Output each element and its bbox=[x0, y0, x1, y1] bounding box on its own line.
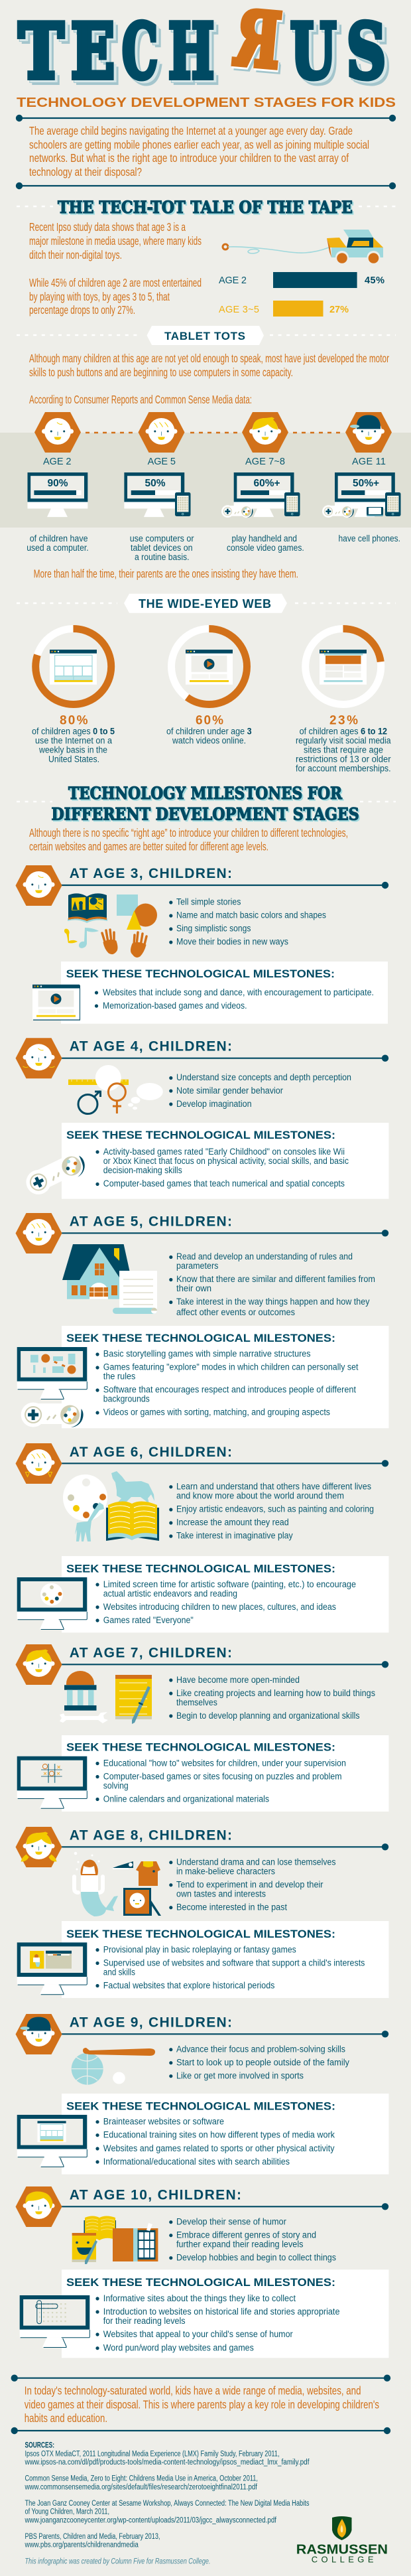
icon: computer with fantasy game bbox=[17, 1942, 87, 1995]
text: toy percentages bbox=[29, 276, 202, 317]
bar chart: toys by age: AGE 3~5 bbox=[219, 305, 259, 315]
text: age 6 skills: and know more about the world around them bbox=[176, 1491, 344, 1501]
text: age 8 milestones: Supervised use of websites and software that support a child's interests bbox=[103, 1958, 365, 1968]
heading: at age 5 bbox=[16, 1213, 388, 1253]
text: age 6 skills: Increase the amount they read bbox=[176, 1518, 289, 1528]
text: age 5 milestones: Games featuring "explore" modes in which children can personally set bbox=[103, 1362, 359, 1372]
text: age 8 milestones: Factual websites that explore historical periods bbox=[103, 1980, 275, 1990]
heading: seek milestones: SEEK THESE TECHNOLOGICAL MILESTONES: bbox=[66, 1562, 335, 1575]
text: age 5 milestones: Software that encourages respect and introduces people of different bbox=[103, 1385, 356, 1395]
text: toy percentages: by playing with toys, by ages 3 to 5, that bbox=[29, 290, 170, 303]
text: age 10 milestones bbox=[95, 2293, 339, 2353]
text: age 6 skills bbox=[169, 1482, 374, 1541]
stat 60%: 60% bbox=[196, 714, 223, 728]
panel: age 6 bbox=[16, 1443, 388, 1632]
label: age 5: AGE 5 bbox=[148, 457, 176, 467]
icon: age 11 child bbox=[345, 412, 392, 453]
text: age 3 milestones bbox=[95, 987, 374, 1011]
subtitle: TECHNOLOGY DEVELOPMENT STAGES FOR KIDS bbox=[17, 96, 396, 110]
icon: computer and phone 50% bbox=[124, 472, 191, 517]
caption: of children have bbox=[30, 534, 88, 543]
panel: age 7-8 stat bbox=[221, 412, 304, 553]
text: age 6 milestones: Websites introducing children to new places, cultures, and ideas bbox=[103, 1602, 336, 1612]
caption: of children under age 3 bbox=[166, 727, 252, 737]
text: age 8 skills: own tastes and interests bbox=[176, 1889, 266, 1899]
text: age 10 milestones: Websites that appeal to your child's sense of humor bbox=[103, 2329, 293, 2339]
text: age 10 skills: Embrace different genres of story and bbox=[176, 2230, 316, 2240]
title letters TECH: E bbox=[71, 7, 115, 96]
sources: www.commonsensemedia.org/sites/default/files/research/zerotoeightfinal2011.pdf bbox=[25, 2483, 258, 2491]
text: age 7 milestones: Online calendars and organizational materials bbox=[103, 1794, 269, 1804]
panel: age 10 milestones bbox=[20, 2269, 388, 2358]
panel: age 3 milestones bbox=[32, 962, 388, 1024]
caption: tablet devices on bbox=[131, 543, 193, 553]
heading: at age 9: AT AGE 9, CHILDREN: bbox=[70, 2015, 232, 2031]
text: age 6 skills: Enjoy artistic endeavors, such as painting and coloring bbox=[176, 1504, 374, 1514]
text: age 6 milestones bbox=[95, 1579, 356, 1625]
text: age 9 skills: Start to look up to people outside of the family bbox=[176, 2058, 349, 2068]
text: motor skills bbox=[29, 352, 389, 379]
heading: at age 6 bbox=[16, 1443, 388, 1484]
caption: of children ages 0 to 5 bbox=[32, 727, 115, 737]
closing block with rules bbox=[11, 2374, 390, 2434]
icon: baseball bat bbox=[83, 2048, 155, 2056]
text: age 4 milestones: decision-making skills bbox=[103, 1165, 182, 1175]
text: age 3 milestones: Websites that include song and dance, with encouragement to participate. bbox=[103, 987, 374, 997]
text: age 9 skills bbox=[169, 2044, 349, 2081]
stat 23%: 23% bbox=[329, 714, 358, 728]
sources: PBS Parents, Children and Media, February 2013, bbox=[25, 2533, 160, 2541]
text: age 4 milestones bbox=[95, 1147, 349, 1188]
text: age 7 skills: Have become more open-minded bbox=[176, 1675, 300, 1685]
heading: the wide-eyed web: THE WIDE-EYED WEB bbox=[139, 597, 271, 610]
credit: This infographic was created by Column Five for Rasmussen College. bbox=[25, 2557, 211, 2565]
panel: age 7 milestones bbox=[17, 1735, 388, 1812]
icon: museum column bbox=[64, 1671, 97, 1711]
text: age 9 milestones: Educational training sites on how different types of media work bbox=[103, 2130, 335, 2140]
text: age 5 skills: Take interest in the way things happen and how they bbox=[176, 1297, 370, 1307]
caption: use the Internet on a bbox=[35, 736, 112, 746]
heading: at age 9 bbox=[16, 2014, 388, 2054]
panel: age 8 milestones bbox=[17, 1921, 388, 1998]
logo text: RASMUSSEN bbox=[296, 2541, 388, 2557]
panel: age 7 bbox=[16, 1644, 388, 1812]
donut chart 60% bbox=[171, 629, 247, 705]
caption bbox=[227, 534, 304, 553]
heading: technology milestones: DIFFERENT DEVELOPMENT STAGES bbox=[52, 804, 359, 823]
icon: notepad and pen bbox=[115, 1675, 152, 1724]
heading: at age 8: AT AGE 8, CHILDREN: bbox=[70, 1827, 232, 1843]
text: age 10 milestones: Word pun/word play websites and games bbox=[103, 2343, 254, 2353]
text: age 7 skills: themselves bbox=[176, 1697, 217, 1707]
text: age 3 skills: Move their bodies in new ways bbox=[176, 936, 288, 946]
text: age 8 skills: Understand drama and can lose themselves bbox=[176, 1857, 336, 1867]
text: age 9 milestones: Brainteaser websites or software bbox=[103, 2117, 224, 2127]
heading: at age 3 bbox=[16, 865, 388, 906]
text: age 8 skills: in make-believe characters bbox=[176, 1867, 275, 1877]
caption bbox=[32, 727, 115, 764]
icon: open book bbox=[84, 2216, 116, 2240]
heading: seek milestones: SEEK THESE TECHNOLOGICAL MILESTONES: bbox=[66, 967, 335, 980]
icon: game pad bbox=[21, 1402, 84, 1427]
text: parents insisting: More than half the time, their parents are the ones insisting they have them. bbox=[34, 567, 298, 581]
icon: ruler and ball bbox=[68, 1065, 129, 1091]
panel: 80% ring bbox=[32, 629, 115, 764]
icon: computer with tic-tac-toe bbox=[17, 1756, 87, 1808]
icon: hands bbox=[102, 930, 147, 957]
icon: video page bbox=[186, 650, 233, 685]
text: age 5 skills: affect other events or outcomes bbox=[176, 1307, 295, 1317]
heading: at age 4 bbox=[16, 1038, 388, 1078]
donut chart 80% bbox=[36, 629, 111, 705]
text: ipso study bbox=[29, 220, 202, 261]
panel: age 8 bbox=[16, 1827, 388, 1998]
icon: game pad bbox=[22, 1149, 89, 1199]
text: age 7 skills: Like creating projects and learning how to build things bbox=[176, 1688, 375, 1698]
icon: orange book with window bbox=[113, 2223, 158, 2261]
caption: a routine basis. bbox=[135, 552, 190, 562]
text: age 7 milestones bbox=[95, 1758, 346, 1804]
bar chart: toys by age: 27% bbox=[329, 305, 349, 315]
text: age 6 skills: Take interest in imaginative play bbox=[176, 1531, 293, 1541]
sources bbox=[25, 2442, 310, 2549]
caption: play handheld and bbox=[232, 534, 297, 543]
text: ipso study: ditch their non-digital toys. bbox=[29, 248, 122, 261]
icon: t-shirt bbox=[136, 1861, 160, 1886]
heading: at age 10 bbox=[16, 2186, 388, 2227]
text: ipso study: Recent Ipso study data shows that age 3 is a bbox=[29, 220, 186, 234]
sources: The Joan Ganz Cooney Center at Sesame Workshop, Always Connected: The New Digital Media Habits bbox=[25, 2500, 310, 2508]
icon: computer with sorting game bbox=[17, 1347, 87, 1399]
text: age 6 milestones: Games rated "Everyone" bbox=[103, 1615, 194, 1625]
sources: Common Sense Media, Zero to Eight: Childrens Media Use in America, October 2011, bbox=[25, 2475, 258, 2483]
panel: age 4 milestones bbox=[22, 1123, 388, 1199]
text: age 9 skills: Advance their focus and problem-solving skills bbox=[176, 2044, 345, 2054]
icon: story book bbox=[68, 893, 107, 923]
heading: at age 7 bbox=[16, 1644, 388, 1685]
caption: have cell phones. bbox=[338, 534, 400, 543]
panel: age 6 milestones bbox=[17, 1556, 388, 1632]
text: age 5 skills: parameters bbox=[176, 1261, 219, 1271]
text: age 9 milestones: Informational/educational sites with search abilities bbox=[103, 2157, 290, 2167]
text: age 10 skills bbox=[169, 2217, 336, 2263]
caption: restrictions of 13 or older bbox=[296, 754, 391, 764]
panel: age 9 milestones bbox=[17, 2094, 388, 2175]
icon: video web page bbox=[32, 985, 80, 1021]
text: age 10 milestones: for their reading levels bbox=[103, 2316, 186, 2326]
heading: at age 4: AT AGE 4, CHILDREN: bbox=[70, 1038, 232, 1054]
text: according to: According to Consumer Reports and Common Sense Media data: bbox=[29, 393, 252, 406]
text: age 6 milestones: actual artistic endeavors and reading bbox=[103, 1589, 237, 1599]
caption: watch videos online. bbox=[172, 736, 246, 746]
heading: seek milestones: SEEK THESE TECHNOLOGICAL MILESTONES: bbox=[66, 1741, 335, 1754]
text: age 4 milestones: Computer-based games that teach numerical and spatial concepts bbox=[103, 1179, 345, 1188]
icon: paint palette bbox=[63, 1474, 107, 1521]
caption: sites that require age bbox=[304, 745, 383, 755]
icon: computer and phone 50%: 50% bbox=[145, 478, 166, 489]
heading: at age 6: AT AGE 6, CHILDREN: bbox=[70, 1445, 232, 1460]
heading: the wide-eyed web bbox=[124, 594, 287, 613]
sources: www.pbs.org/parents/childrenandmedia bbox=[25, 2541, 139, 2549]
heading: seek milestones: SEEK THESE TECHNOLOGICAL MILESTONES: bbox=[66, 1129, 335, 1141]
caption: of children ages 6 to 12 bbox=[300, 727, 387, 737]
heading: at age 7: AT AGE 7, CHILDREN: bbox=[70, 1645, 232, 1660]
text: age 3 milestones: Memorization-based games and videos. bbox=[103, 1001, 247, 1011]
icon: gender symbols bbox=[78, 1084, 125, 1113]
text: age 5 skills bbox=[169, 1252, 375, 1317]
icon: computer with word search bbox=[20, 2295, 89, 2348]
text: age 10 milestones: Introduction to websites on historical life and stories appropriate bbox=[103, 2307, 340, 2317]
icon: horse bbox=[111, 1471, 154, 1506]
band background bbox=[0, 433, 411, 528]
text: no right age bbox=[29, 826, 348, 853]
heading: at age 10: AT AGE 10, CHILDREN: bbox=[70, 2188, 241, 2203]
text: age 8 milestones: Provisional play in basic roleplaying or fantasy games bbox=[103, 1944, 296, 1954]
text: toy percentages: While 45% of children age 2 are most entertained bbox=[29, 276, 202, 289]
icon: framed portrait on easel bbox=[123, 1888, 161, 1916]
text: age 3 skills: Tell simple stories bbox=[176, 896, 241, 906]
text: age 8 milestones bbox=[95, 1944, 365, 1990]
title letters TECH: H bbox=[168, 7, 214, 96]
icon: hat bbox=[113, 1861, 133, 1869]
donut chart 23% bbox=[306, 629, 381, 705]
text: age 7 milestones: Computer-based games or sites focusing on puzzles and problem bbox=[103, 1771, 342, 1781]
bar chart: toys by age bbox=[219, 272, 384, 317]
icon: shapes bbox=[117, 894, 157, 930]
sources: of Young Children, March 2011, bbox=[25, 2508, 109, 2516]
sources: www.joanganzcooneycenter.org/wp-content/uploads/2011/03/jgcc_alwaysconnected.pdf bbox=[25, 2516, 277, 2524]
panel: age 5 bbox=[16, 1213, 388, 1428]
icon: mermaid bbox=[74, 1852, 118, 1916]
icon: web page grid bbox=[50, 650, 97, 685]
text: age 10 skills: further expand their reading levels bbox=[176, 2240, 304, 2250]
caption: United States. bbox=[48, 754, 99, 764]
text: age 5 milestones bbox=[95, 1349, 359, 1417]
title: Tech R Us bbox=[19, 0, 386, 96]
text: age 6 skills: Learn and understand that others have different lives bbox=[176, 1482, 371, 1492]
text: motor skills: skills to push buttons and are beginning to use computers in some capacity. bbox=[29, 366, 293, 379]
caption: weekly basis in the bbox=[38, 745, 107, 755]
logo: Rasmussen College bbox=[296, 2516, 388, 2565]
sources: SOURCES: bbox=[25, 2442, 54, 2450]
text: age 4 skills: Note similar gender behavior bbox=[176, 1086, 283, 1096]
panel: age 4 bbox=[16, 1038, 388, 1199]
label: age 2: AGE 2 bbox=[43, 457, 72, 467]
heading: at age 5: AT AGE 5, CHILDREN: bbox=[70, 1214, 232, 1229]
icon: computer, phone, tablet and game pad 50%+ bbox=[322, 472, 400, 518]
caption: use computers or bbox=[130, 534, 194, 543]
panel: 60% ring bbox=[166, 629, 252, 746]
icon: music notes bbox=[64, 928, 99, 948]
intro text bbox=[29, 124, 369, 179]
icon: computer 90% bbox=[28, 472, 88, 517]
heading: seek milestones: SEEK THESE TECHNOLOGICAL MILESTONES: bbox=[66, 2100, 335, 2112]
text: toy percentages: percentage drops to only 27%. bbox=[29, 303, 135, 317]
title letters TECH: C bbox=[122, 7, 158, 96]
icon: wrench bbox=[60, 1712, 108, 1723]
text: age 5 milestones: the rules bbox=[103, 1372, 136, 1382]
panel: 23% ring bbox=[296, 629, 391, 774]
text: age 7 milestones: Educational "how to" websites for children, under your supervision bbox=[103, 1758, 346, 1768]
heading: the tech-tot tale of the tape: THE TECH-TOT TALE OF THE TAPE bbox=[58, 198, 353, 217]
text: age 4 skills: Understand size concepts and depth perception bbox=[176, 1072, 351, 1082]
text: age 4 skills bbox=[169, 1072, 351, 1109]
text: age 8 skills bbox=[169, 1857, 336, 1912]
panel: age 10 bbox=[16, 2186, 388, 2358]
intro block with rules bbox=[16, 115, 396, 189]
icon: basketball bbox=[72, 2053, 103, 2085]
text: age 7 skills: Begin to develop planning and organizational skills bbox=[176, 1711, 360, 1721]
caption bbox=[296, 727, 391, 774]
stat 80%: 80% bbox=[60, 714, 88, 728]
sources: www.ipsos-na.com/dl/pdf/products-tools/media-content-technology/ipsos_mediact_lmx_family.pdf bbox=[25, 2459, 310, 2467]
text: age 4 skills: Develop imagination bbox=[176, 1099, 252, 1109]
caption bbox=[27, 534, 89, 553]
icon: computer, phone and game pad 60%+ bbox=[221, 472, 300, 518]
heading: tablet tots: TABLET TOTS bbox=[164, 330, 245, 342]
icon: age 5 child bbox=[138, 412, 184, 453]
heading: technology milestones: TECHNOLOGY MILESTONES FOR bbox=[68, 784, 342, 803]
text: age 3 skills: Sing simplistic songs bbox=[176, 923, 251, 933]
text: age 5 skills: Read and develop an understanding of rules and bbox=[176, 1252, 353, 1261]
logo subtext: COLLEGE bbox=[312, 2555, 374, 2565]
text: no right age: certain websites and games are better suited for different age levels. bbox=[29, 840, 268, 853]
bar chart: toys by age: AGE 2 bbox=[219, 275, 247, 286]
label: age 7-8: AGE 7~8 bbox=[245, 457, 285, 467]
text: age 8 skills: Become interested in the past bbox=[176, 1902, 287, 1912]
panel: age 11 stat bbox=[322, 412, 400, 543]
text: age 10 skills: Develop their sense of humor bbox=[176, 2217, 286, 2227]
text: age 7 skills bbox=[169, 1675, 375, 1721]
panel: age 9 bbox=[16, 2014, 388, 2175]
icon: smiley notebook and pen bbox=[72, 2233, 97, 2264]
title letters US: S bbox=[347, 7, 386, 96]
icon: baseball bbox=[113, 2072, 125, 2084]
text: age 3 skills: Name and match basic colors and shapes bbox=[176, 910, 326, 920]
text: age 9 milestones bbox=[95, 2117, 335, 2167]
heading: at age 3: AT AGE 3, CHILDREN: bbox=[70, 866, 232, 881]
icon: computer, phone and game pad 60%+: 60%+ bbox=[253, 478, 280, 489]
title letters TECH: T bbox=[19, 7, 64, 96]
text: age 5 milestones: Videos or games with sorting, matching, and grouping aspects bbox=[103, 1407, 330, 1417]
panel: age 5 milestones bbox=[17, 1326, 388, 1428]
icon: age 7-8 child bbox=[242, 412, 288, 453]
text: ipso study: major milestone in media usage, where many kids bbox=[29, 234, 202, 248]
icon: flame shield bbox=[332, 2516, 351, 2540]
text: age 8 milestones: and skills bbox=[103, 1967, 135, 1977]
icon: age 2 child bbox=[34, 412, 81, 453]
caption: console video games. bbox=[227, 543, 304, 553]
text: age 9 milestones: Websites and games related to sports or other physical activity bbox=[103, 2143, 335, 2153]
icon: giraffe bbox=[75, 1502, 104, 1541]
bar chart: toys by age: 45% bbox=[365, 275, 384, 286]
intro text: technology at their disposal? bbox=[29, 165, 142, 179]
icon: computer with web page bbox=[17, 2115, 87, 2167]
icon: thought bubble bbox=[128, 1083, 163, 1109]
text: age 4 milestones: or Xbox Kinect that focus on physical activity, social skills, and basic bbox=[103, 1156, 349, 1166]
icon: paper scroll bbox=[113, 1271, 157, 1314]
heading: tablet tots bbox=[147, 326, 264, 345]
caption: regularly visit social media bbox=[296, 736, 391, 746]
icon: pull-along toy truck bbox=[223, 230, 383, 264]
heading: seek milestones: SEEK THESE TECHNOLOGICAL MILESTONES: bbox=[66, 1928, 335, 1940]
text: age 10 skills: Develop hobbies and begin to collect things bbox=[176, 2253, 336, 2263]
text: age 10 milestones: Informative sites about the things they like to collect bbox=[103, 2293, 296, 2303]
panel: age 2 stat bbox=[27, 412, 89, 553]
caption bbox=[130, 534, 194, 562]
caption: used a computer. bbox=[27, 543, 89, 553]
heading: seek milestones: SEEK THESE TECHNOLOGICAL MILESTONES: bbox=[66, 1332, 335, 1344]
heading: technology milestones bbox=[52, 784, 359, 823]
icon: house bbox=[62, 1244, 131, 1299]
text: age 9 skills: Like or get more involved in sports bbox=[176, 2071, 304, 2081]
text: age 6 milestones: Limited screen time for artistic software (painting, etc.) to encourage bbox=[103, 1579, 356, 1589]
caption bbox=[166, 727, 252, 746]
heading: seek milestones: SEEK THESE TECHNOLOGICAL MILESTONES: bbox=[66, 2276, 335, 2289]
closing text: habits and education. bbox=[25, 2411, 107, 2425]
sources: Ipsos OTX MediaCT, 2011 Longitudinal Media Experience (LMX) Family Study, February 2011, bbox=[25, 2450, 280, 2458]
label: age 11: AGE 11 bbox=[352, 457, 386, 467]
text: age 5 milestones: Basic storytelling games with simple narrative structures bbox=[103, 1349, 311, 1359]
icon: social media page bbox=[320, 650, 367, 685]
caption: for account memberships. bbox=[296, 764, 391, 774]
panel: age 3 bbox=[16, 865, 388, 1024]
text: age 8 skills: Tend to experiment in and develop their bbox=[176, 1880, 323, 1890]
heading: at age 8 bbox=[16, 1827, 388, 1867]
icon: open book bbox=[106, 1501, 159, 1541]
text: age 5 skills: Know that there are similar and different families from bbox=[176, 1274, 375, 1284]
text: age 4 milestones: Activity-based games rated "Early Childhood" on consoles like Wii bbox=[103, 1147, 345, 1157]
text: age 3 skills bbox=[169, 896, 326, 946]
closing text bbox=[25, 2384, 379, 2425]
icon: computer with palette bbox=[17, 1577, 87, 1630]
title letters US: U bbox=[290, 7, 336, 96]
icon: computer, phone, tablet and game pad 50%+: 50%+ bbox=[353, 478, 379, 489]
text: age 5 skills: their own bbox=[176, 1283, 211, 1293]
panel: age 5 stat bbox=[124, 412, 194, 562]
icon: computer 90%: 90% bbox=[47, 478, 68, 489]
text: age 7 milestones: solving bbox=[103, 1780, 129, 1790]
text: age 5 milestones: backgrounds bbox=[103, 1394, 150, 1404]
